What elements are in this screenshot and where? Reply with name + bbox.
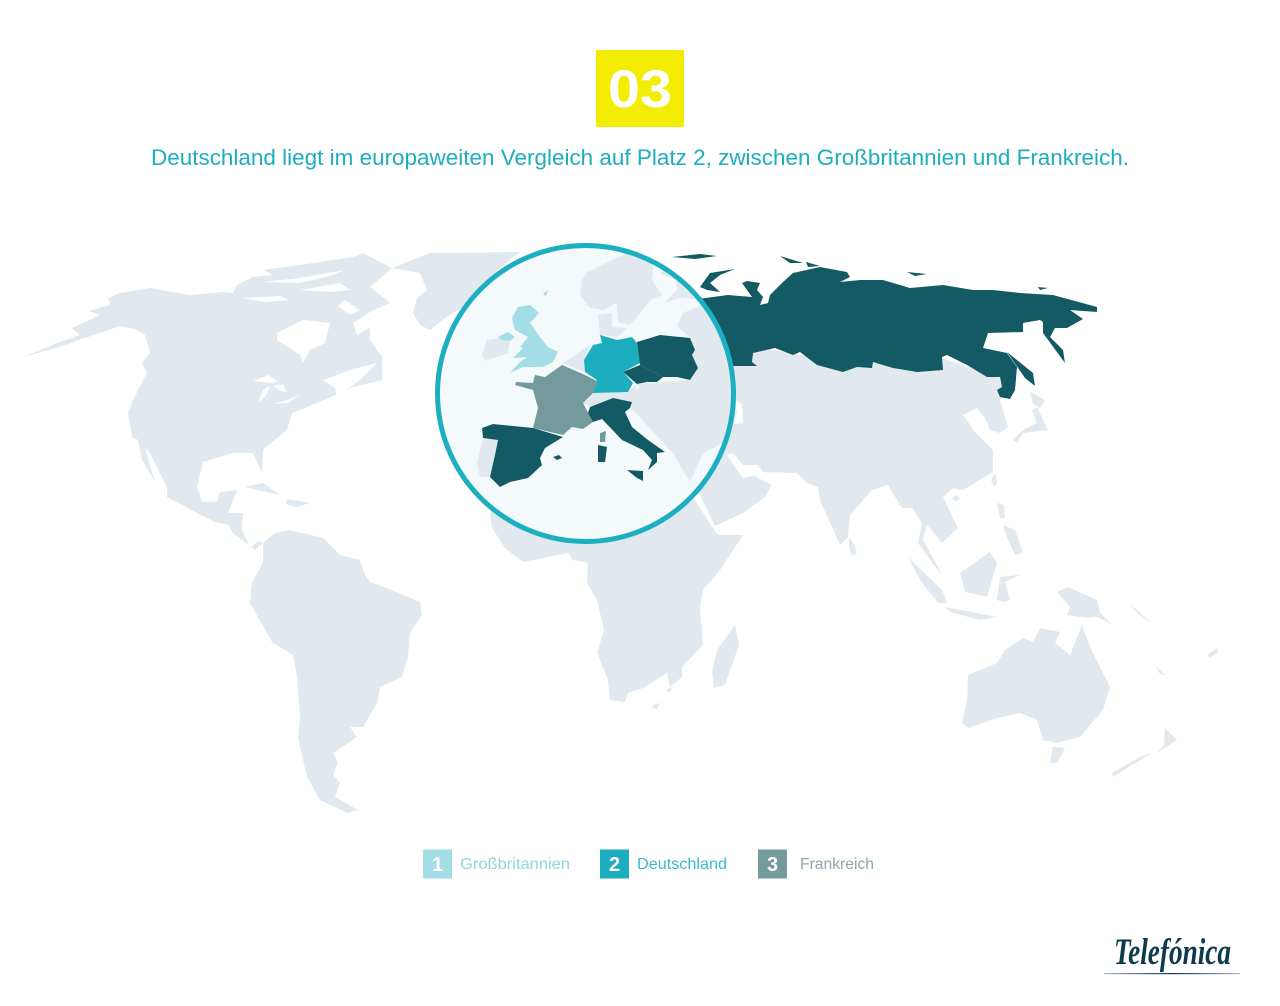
legend item 2: Deutschland	[600, 850, 727, 878]
Russia highlighted	[672, 254, 1097, 399]
legend item 2: Deutschland: Deutschland	[637, 856, 727, 873]
land: Africa	[490, 460, 743, 709]
country: Great Britain	[498, 290, 558, 373]
legend item 3: Frankreich: Frankreich	[800, 856, 874, 873]
badge: number 03	[596, 50, 684, 127]
land: Australia and New Zealand	[962, 625, 1218, 777]
world map	[23, 252, 1218, 813]
legend item 1: Großbritannien	[423, 850, 570, 878]
ring	[438, 246, 734, 542]
water: Hudson Bay, lakes and Arctic channels	[243, 270, 377, 404]
title: Deutschland liegt im europaweiten Vergleich auf Platz 2, zwischen Großbritannien und Frankreich.	[151, 145, 1129, 170]
land: Greenland	[392, 252, 520, 330]
land: North America	[23, 253, 392, 550]
legend item 3: Frankreich: 3	[767, 854, 778, 876]
other European land	[477, 254, 731, 482]
water: Caspian Sea	[734, 400, 743, 424]
legend item 1: Großbritannien: Großbritannien	[460, 856, 570, 873]
countries: Poland, Spain, Italy highlighted	[482, 335, 698, 487]
country: Germany	[584, 335, 640, 393]
legend	[423, 850, 874, 878]
land: South America	[250, 530, 422, 813]
legend item 3: Frankreich	[758, 850, 874, 878]
badge: number 03: 03	[608, 60, 672, 119]
legend item 1: Großbritannien: 1	[432, 854, 443, 876]
country: France	[515, 365, 606, 442]
logo: Telefónica: Telefónica	[1114, 932, 1231, 973]
legend item 2: Deutschland: 2	[609, 854, 620, 876]
land: Asia and Arabia	[670, 340, 1153, 625]
magnifier circle: Europe	[438, 240, 745, 542]
